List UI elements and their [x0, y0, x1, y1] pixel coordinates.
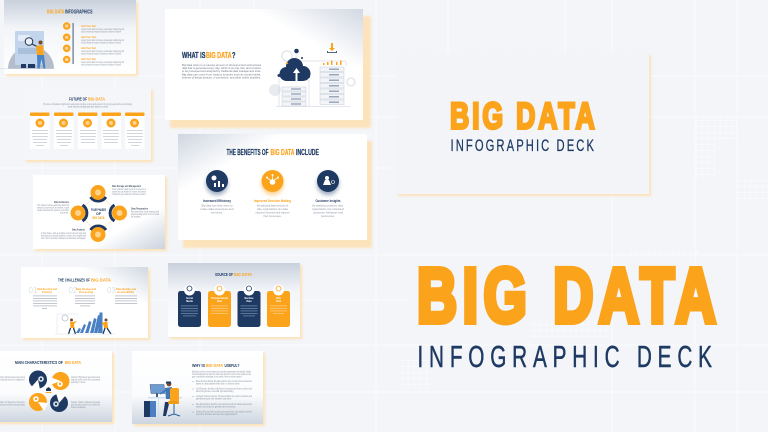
panel: challenges of big data: BIG DATA — [91, 278, 112, 282]
timeline text: Lorem ipsum dolor sit amet, consectetur adipiscing elit — [81, 39, 124, 42]
panel: source of big data: BIG DATA — [234, 272, 253, 277]
body and bullets: and improve overall productivity. — [196, 390, 234, 393]
benefit: customer insights: organizations can understand — [312, 208, 345, 211]
phase texts: can inform decision-making and business strategies. — [41, 237, 86, 240]
panel: why is big data useful — [132, 351, 265, 426]
four source cards: Data — [247, 300, 252, 303]
panel: small slide big data infographics — [0, 0, 138, 76]
numbered items: Accessibility — [117, 291, 135, 294]
panel: small slide future of big data — [24, 88, 153, 162]
benefit: customer insights: By analyzing customer data, — [312, 204, 344, 208]
numbered items: Data Quality and — [116, 288, 137, 291]
four source cards — [178, 284, 290, 327]
phase diagram — [70, 185, 127, 242]
timeline text: Lorem ipsum dolor sit amet, consectetur adipiscing elit — [81, 50, 124, 53]
center label: BIG DATA — [92, 216, 105, 220]
panel: benefits of big data — [178, 134, 372, 248]
panel: four phases of big data — [33, 175, 167, 251]
timeline text — [81, 25, 124, 66]
four source cards: Transactional — [211, 297, 228, 300]
panel: why is big data useful: BIG DATA — [206, 363, 224, 368]
characteristic texts: Volume: Big Data involves large amounts — [0, 376, 25, 379]
benefit: improved decision making: By analyzing large amounts of — [257, 204, 288, 208]
illustration: dominoes and people — [55, 312, 115, 334]
panel: benefits of big data: INCLUDE — [296, 148, 319, 157]
benefit: improved decision making — [254, 170, 291, 218]
body text: to be processed and analyzed by traditional data management tools. — [182, 69, 261, 73]
panel: small slide future of big data: BIG DATA — [88, 96, 106, 102]
benefit: improved decision making: data, organizations can make — [257, 208, 289, 211]
numbered items — [28, 286, 137, 309]
characteristic texts: Veracity: Quality of data can be varied — [71, 401, 100, 404]
benefit: increased efficiency: services. — [211, 212, 223, 214]
benefit: customer insights: Customer Insights — [316, 199, 341, 203]
four source cards: Media — [186, 301, 193, 303]
body and bullets — [192, 370, 253, 416]
numbered items: Processing — [79, 291, 94, 294]
numbered items: Data Storage and — [76, 288, 97, 291]
phase texts: system that can handle the volume and variety — [112, 190, 147, 194]
main subtitle: INFOGRAPHIC DECK — [418, 339, 712, 374]
panel: small slide big data infographics: INFOGRAPHICS — [65, 10, 93, 16]
four source cards: Social — [186, 298, 193, 300]
timeline text: Add Your Text — [81, 25, 96, 28]
characteristic texts: Variety: The data comes in many forms, — [0, 401, 25, 404]
phase texts: Raw data often needs cleaning and — [131, 210, 159, 214]
numbered items: Data Security and — [37, 288, 58, 291]
slide title: WHY IS — [192, 363, 205, 368]
numbered items: 01 — [28, 286, 38, 295]
phase texts: techniques to identify patterns, trends, and insights that — [41, 234, 86, 238]
body text: Big Data refers to a massive amount of structured and unstructured — [182, 63, 261, 67]
illustration: person at desk — [144, 382, 182, 417]
timeline text: Add Your Text — [81, 36, 96, 39]
body and bullets: preferences for better service. — [196, 398, 232, 400]
center label: FOUR PHASES — [91, 208, 106, 212]
cover title: BIG DATA — [450, 95, 595, 137]
benefit: improved decision making: Improved Decision Making — [254, 199, 291, 203]
timeline text: sed do eiusmod tempor incididunt ut labore et dolore — [81, 52, 121, 56]
slide title: SOURCE OF — [215, 272, 233, 277]
panel: cover slide preview — [397, 53, 651, 196]
characteristic texts: Velocity: Big Data is generated at a — [71, 376, 101, 379]
panel: benefits of big data: BIG DATA — [270, 148, 295, 157]
body and bullets: Better Decision-Making: Big data analytics helps to make informed decisions — [196, 380, 253, 383]
timeline text: sed do eiusmod tempor incididunt ut labore et dolore — [81, 42, 121, 44]
body and bullets: New Opportunities: Identifies new business trends and market opportunities — [196, 403, 253, 406]
body and bullets: and knowledge that can help them make better decisions, improve their operations, and — [192, 373, 251, 376]
body and bullets: gain a competitive advantage in the market. Here are some reasons: — [192, 376, 242, 378]
body text — [182, 63, 261, 79]
benefit: improved decision making: their processes. — [264, 215, 282, 218]
benefit: improved decision making: informed decisions and improve — [256, 212, 290, 214]
four source cards: Data — [276, 300, 282, 303]
phase texts: Data Storage and Management — [112, 185, 141, 188]
phase texts: various sources such as sensors, social — [37, 206, 69, 210]
timeline text: sed do eiusmod tempor incididunt ut labore et dolore — [81, 64, 121, 66]
slide title: THE BENEFITS OF — [226, 148, 269, 157]
subtitle: The future of big data is bright and is expected to continue to grow and evolve in the coming years with new technology — [43, 103, 133, 106]
panel: why is big data useful: USEFUL? — [224, 363, 240, 368]
numbered items: 03 — [107, 286, 116, 295]
benefit: increased efficiency: make data processes and — [200, 208, 234, 211]
four source cards: Data — [217, 300, 223, 303]
numbered items: Privacy — [42, 291, 53, 294]
panel: what is big data: BIG DATA — [206, 51, 232, 60]
body and bullets: which can lead to growth and revenue. — [196, 406, 236, 408]
characteristic texts: better analysis. — [71, 406, 86, 409]
timeline text: sed do eiusmod tempor incididunt ut labore et dolore — [81, 30, 121, 34]
phase texts: of data being generated by business systems. — [112, 193, 146, 196]
phase texts: media, transactional systems, and other — [37, 209, 69, 212]
petal diagram — [29, 370, 70, 412]
panel: main characteristics of big data: BIG DATA — [65, 360, 81, 365]
timeline text: Lorem ipsum dolor sit amet, consectetur adipiscing elit — [81, 61, 124, 64]
benefit: increased efficiency — [200, 170, 234, 214]
phase texts: Once collected, data needs to be stored in a — [112, 188, 146, 191]
characteristic texts: and accuracy needs to be verified for — [71, 404, 100, 406]
panel: source of big data — [168, 263, 302, 339]
body and bullets: security threats across the organization. — [196, 413, 238, 416]
panel: what is big data — [165, 9, 371, 128]
four source cards: Web — [276, 298, 281, 300]
phase texts — [37, 185, 159, 240]
phase texts: In this phase, data is analyzed using various tools and — [41, 232, 87, 235]
panel: what is big data: ? — [232, 51, 236, 60]
benefit: customer insights: preferences. — [321, 215, 335, 218]
slide title: FUTURE OF — [69, 96, 87, 102]
phase texts: sources. — [60, 212, 69, 214]
panel: challenges of big data — [21, 267, 150, 340]
phase texts: Data Analysis — [72, 228, 86, 232]
four source cards: Machine — [244, 298, 254, 300]
illustration: cloud and servers — [269, 43, 355, 106]
body and bullets: Enhanced Security: Helps to detect and prevent fraud, cyber attacks, and other — [196, 410, 252, 414]
characteristic texts: structured and also unstructured data. — [0, 404, 25, 406]
five cards — [30, 112, 144, 149]
characteristic texts: high rate and it needs to be processed — [71, 378, 100, 382]
phase texts: for analysis. — [131, 216, 141, 218]
body and bullets: based on data analysis rather than on intuition alone. — [196, 382, 240, 386]
timeline text: Lorem ipsum dolor sit amet, consectetur adipiscing elit — [81, 28, 124, 31]
body text: data that is generated every day, which is too big, fast, and complex — [182, 66, 261, 70]
center label: OF — [96, 212, 102, 216]
panel: small slide future of big data: and trends shaping how data is used — [68, 106, 109, 108]
phase texts: Data Preparation — [131, 208, 149, 210]
slide title: MAIN CHARACTERISTICS OF — [15, 360, 63, 365]
phase texts: This phase involves gathering data from — [37, 204, 69, 207]
benefit: customer insights: customer behavior and — [313, 212, 344, 214]
benefit: customer insights — [312, 170, 345, 218]
slide title: BIG DATA — [47, 10, 65, 16]
benefit: increased efficiency: Big data can help users to — [202, 204, 233, 208]
characteristic texts: quickly in time. — [71, 381, 86, 384]
illustration: analyst with magnifier — [0, 31, 54, 69]
timeline text: Add Your Text — [81, 58, 96, 61]
phase texts: preprocessing before it can be used — [131, 213, 159, 216]
benefit: increased efficiency: Increased Efficiency — [203, 199, 231, 203]
panel: main characteristics of big data — [0, 351, 114, 424]
characteristic texts — [0, 376, 101, 409]
timeline text: Add Your Text — [81, 47, 96, 50]
body text: internet of things devices, e-commerce, and other online activities. — [182, 75, 261, 79]
timeline icons — [63, 22, 74, 64]
center label — [91, 208, 106, 220]
cover subtitle: INFOGRAPHIC DECK — [450, 136, 594, 155]
numbered items: 02 — [68, 286, 78, 295]
body and bullets: Big Data is useful for several reasons as it provides organizations with valuable insights — [192, 370, 252, 374]
main title: BIG DATA — [417, 253, 716, 339]
phase texts: Data Collection — [54, 201, 70, 204]
characteristic texts: of data that need to be managed well. — [0, 378, 25, 382]
body and bullets: Cost Reduction: Identifies inefficiencies in processes and helps to reduce costs — [196, 388, 253, 390]
body and bullets: Improved Customer Service: Provides insights into customer behavior and — [196, 395, 252, 398]
slide title: THE CHALLENGES OF — [58, 278, 90, 282]
slide title: WHAT IS — [182, 51, 206, 60]
body text: Big data can come from various sources such as social media, — [182, 72, 261, 76]
